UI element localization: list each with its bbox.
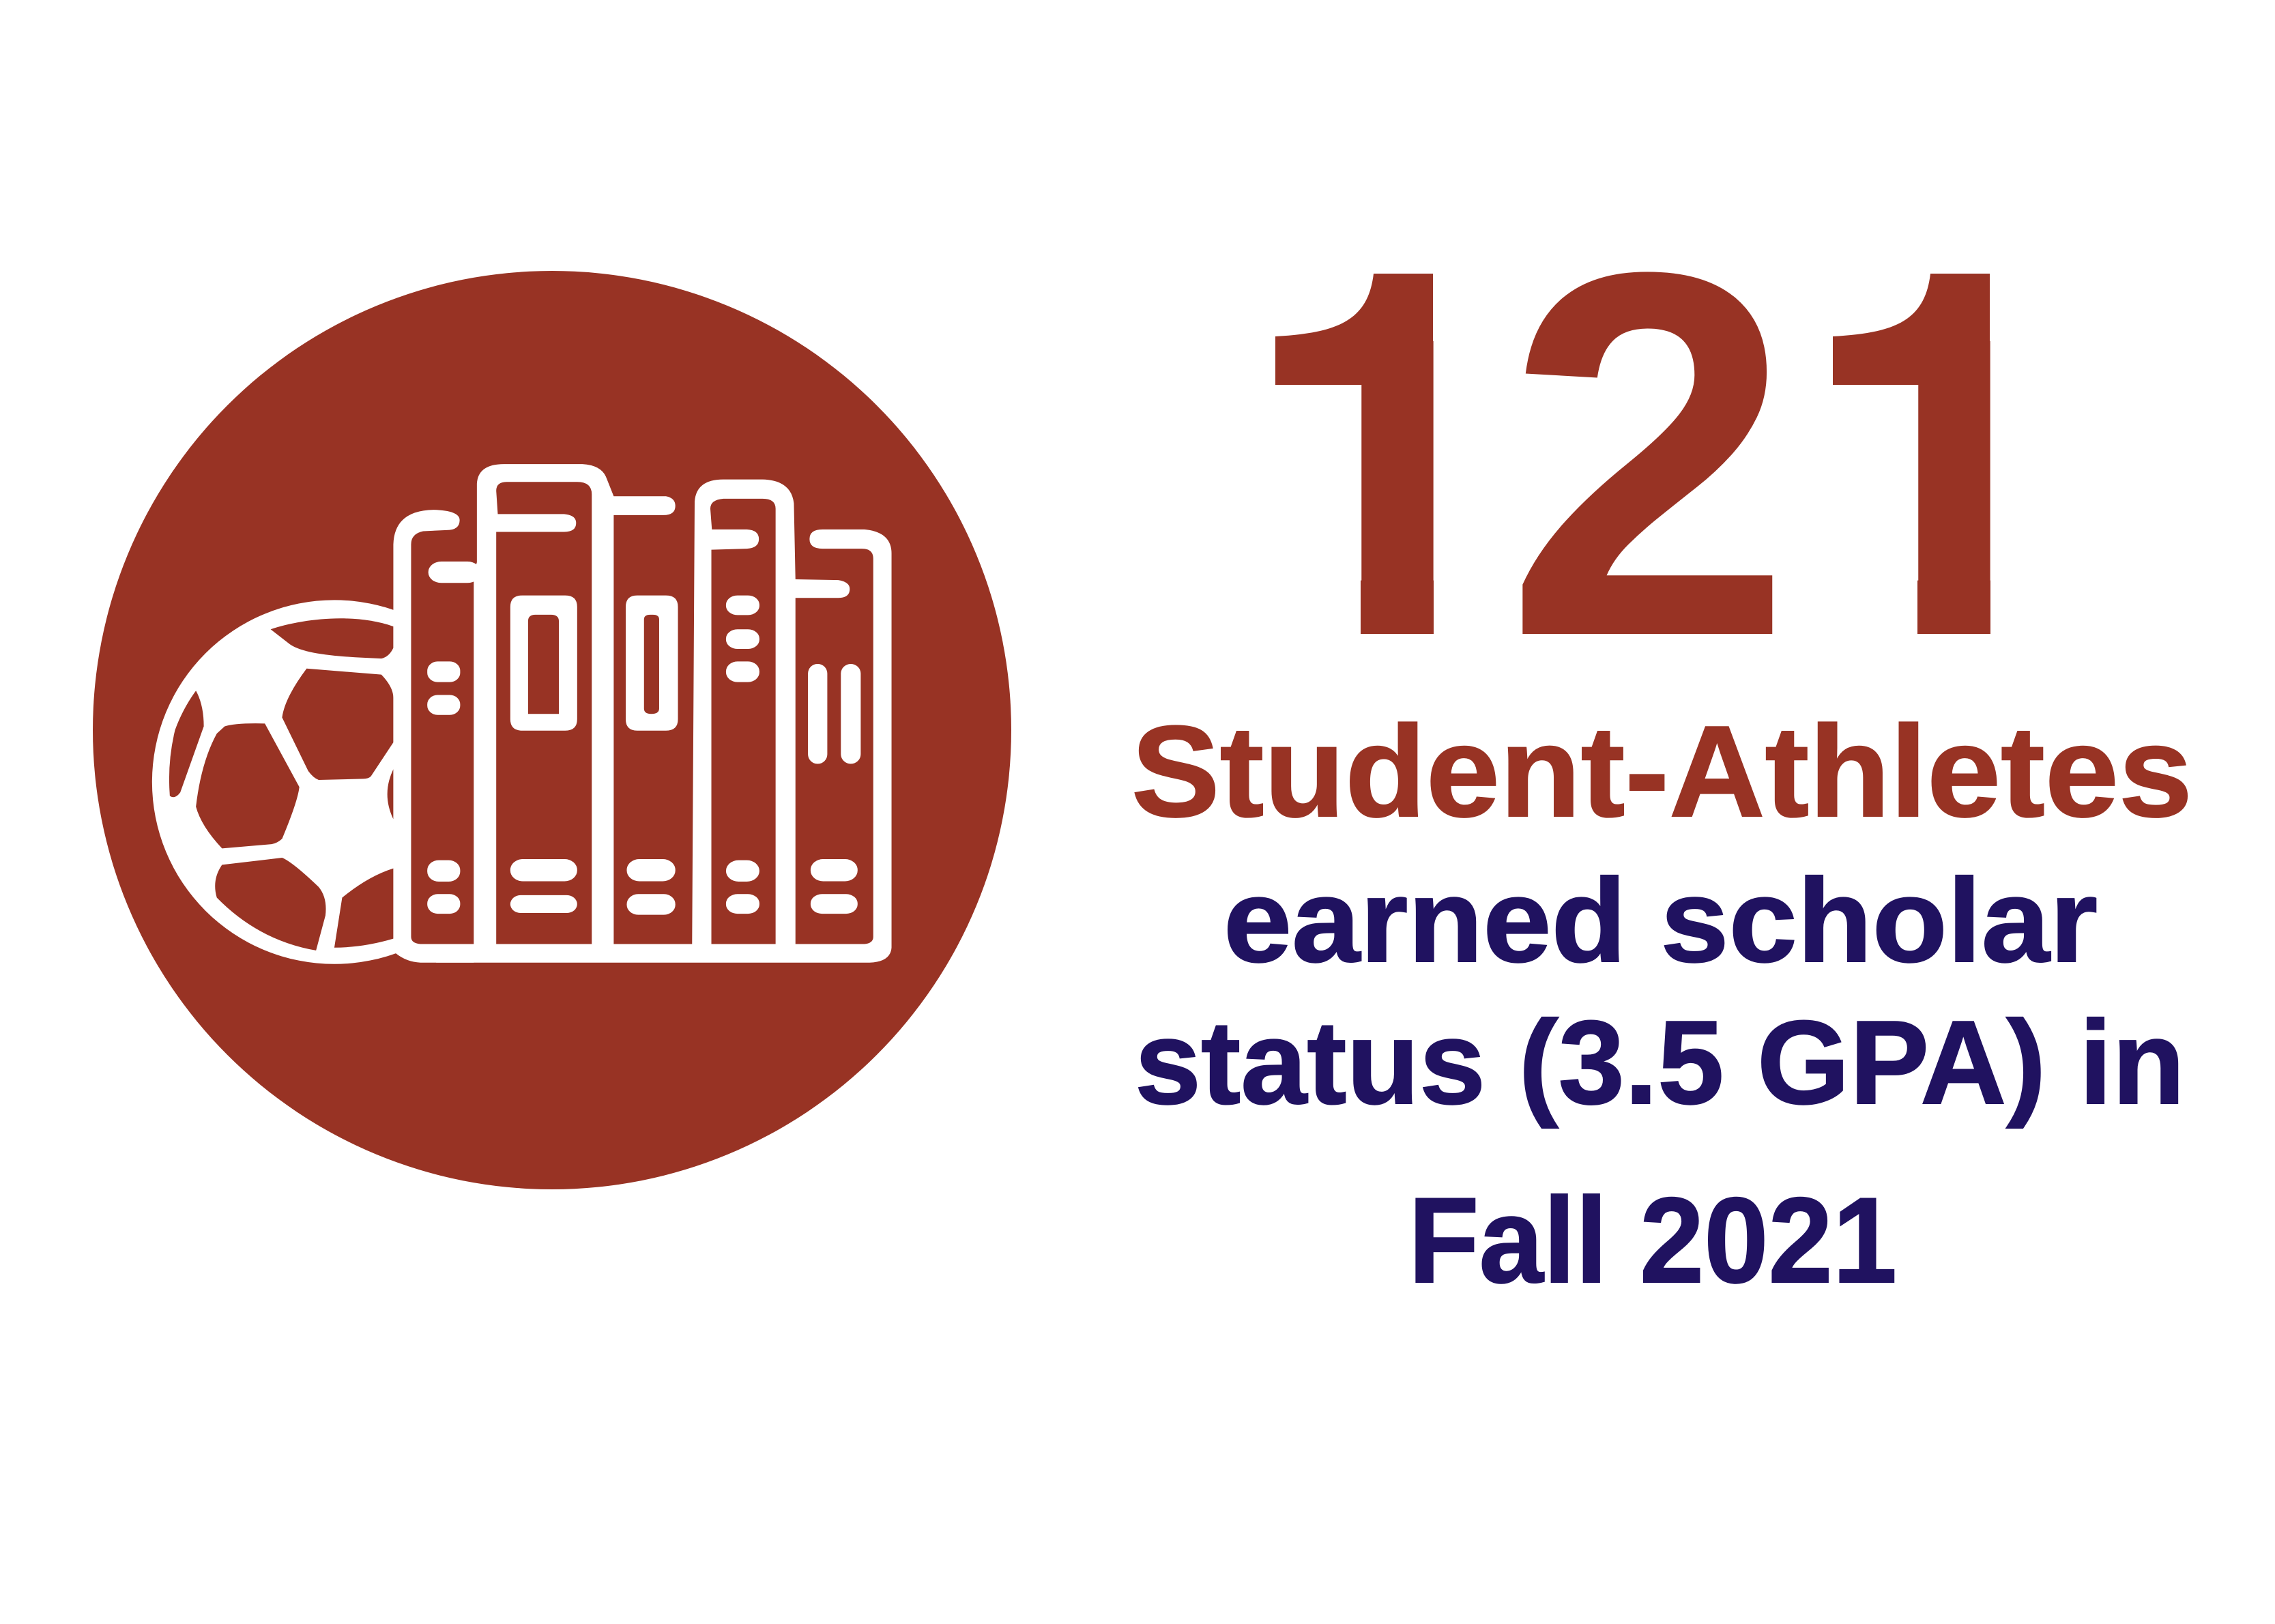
big number: 1	[1796, 160, 2087, 745]
icon: row of books	[393, 464, 892, 963]
icon: soccer ball and books	[152, 464, 892, 964]
text: status (3.5 GPA) in: status (3.5 GPA) in	[1135, 996, 2185, 1129]
icon: soccer ball	[151, 600, 396, 964]
big number: 1	[1239, 160, 1531, 745]
text: Fall 2021: Fall 2021	[1408, 1172, 1897, 1308]
big number: 2	[1505, 165, 1793, 744]
big number	[1275, 272, 1990, 634]
panel: maroon circle badge	[93, 271, 1011, 1189]
text: earned scholar: earned scholar	[1223, 854, 2098, 987]
text: Student-Athletes: Student-Athletes	[1131, 699, 2192, 844]
